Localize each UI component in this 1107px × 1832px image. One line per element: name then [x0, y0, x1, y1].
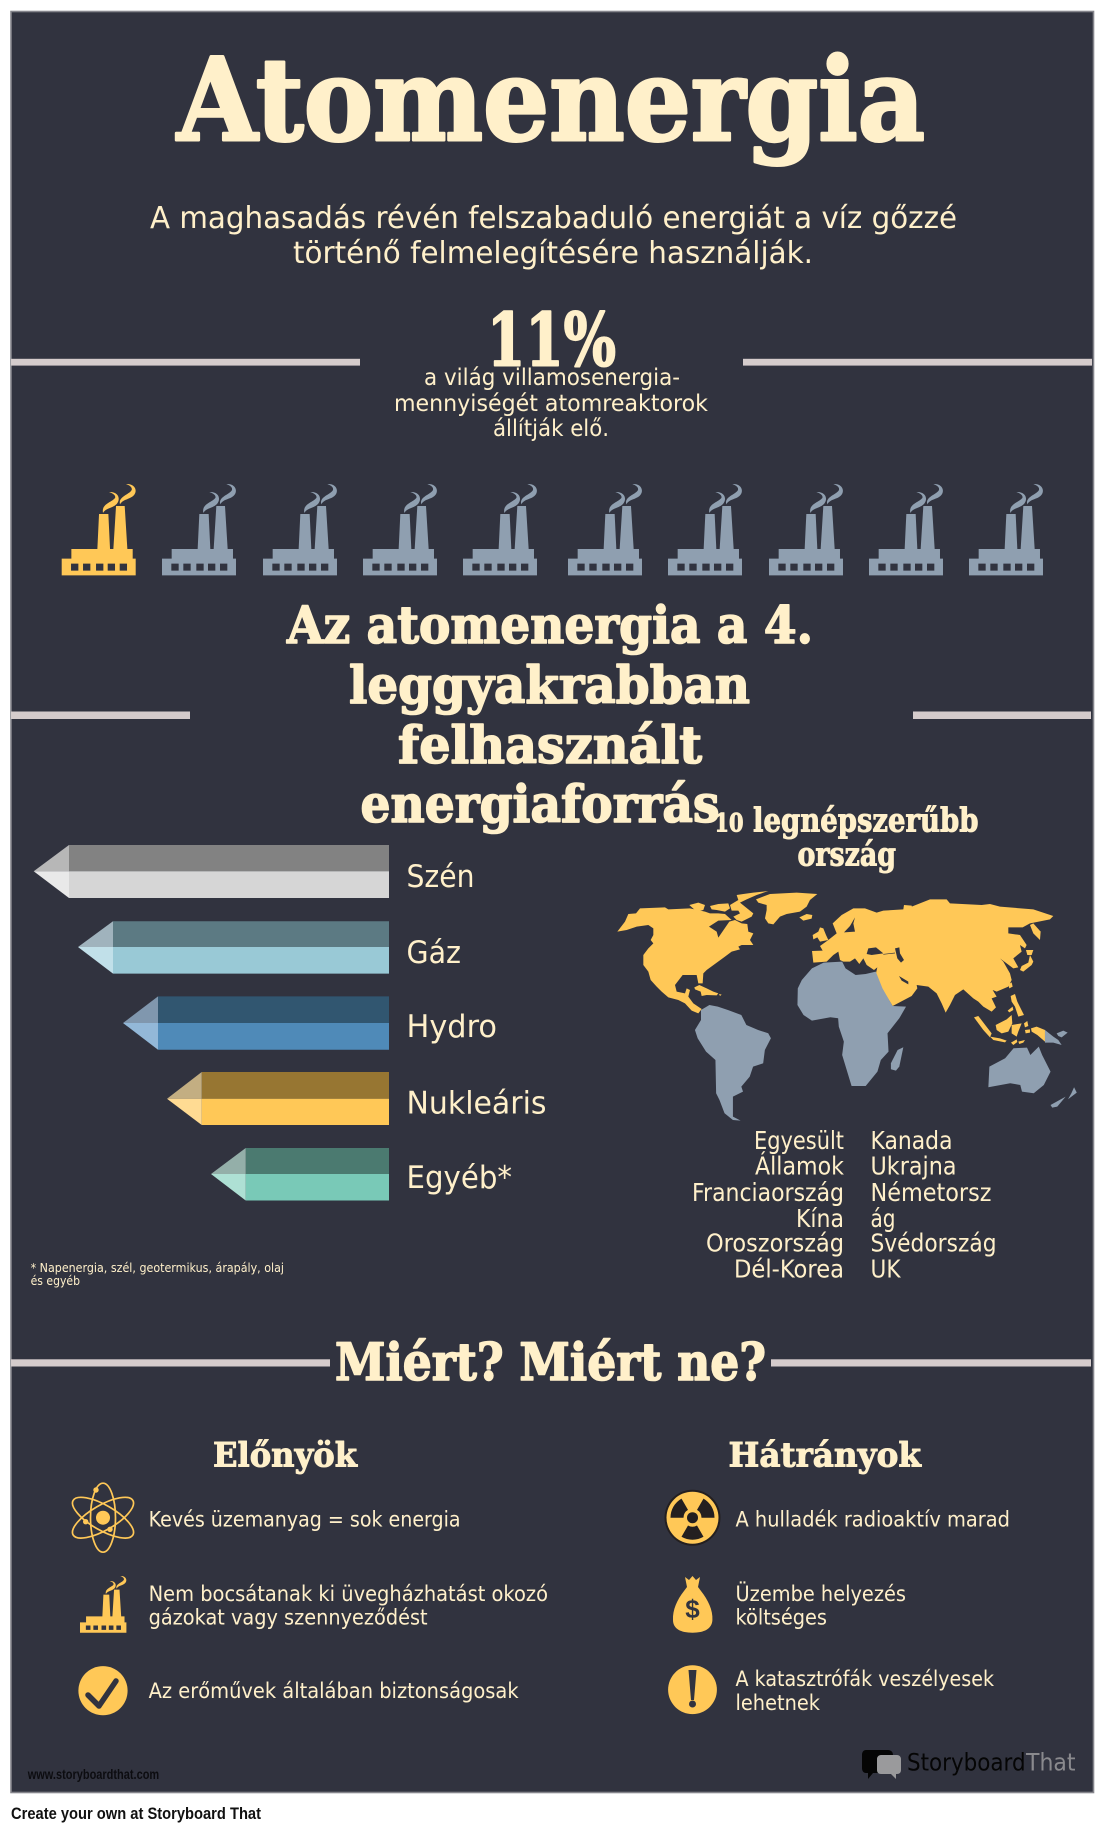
- country list: left column: Államok: [755, 1152, 844, 1180]
- footnote: [31, 1261, 284, 1288]
- advantage: no greenhouse gases: [149, 1582, 548, 1629]
- bar: hydro: Hydro: [406, 1009, 497, 1045]
- icon: highlighted factory: [62, 484, 136, 575]
- factory pictogram row: 1 of 10 highlighted: [62, 484, 1043, 575]
- country list: right column: UK: [870, 1254, 901, 1284]
- logo: Storyboard That: [862, 1749, 1076, 1779]
- heading: top 10 countries: 10 legnépszerűbb: [714, 800, 978, 840]
- bar: gas: Gáz: [406, 935, 461, 971]
- statistic description: [394, 363, 708, 442]
- bar: other: Egyéb*: [406, 1160, 512, 1196]
- bar: nuclear: Nukleáris: [406, 1086, 546, 1122]
- icon: check mark: [78, 1666, 128, 1715]
- intro text: történő felmelegítésére használják.: [293, 236, 813, 271]
- country list: right column: ág: [870, 1204, 896, 1233]
- statistic description: a világ villamosenergia-: [424, 363, 680, 391]
- country list: right column: Németorsz: [870, 1178, 992, 1207]
- country list: right column: Ukrajna: [870, 1152, 956, 1180]
- map: New Guinea: [1045, 1030, 1068, 1045]
- advantage: safe plants: Az erőművek általában biztonságosak: [149, 1679, 519, 1703]
- icon: exclamation mark: [668, 1665, 717, 1714]
- bar: other: [211, 1148, 512, 1200]
- icon: radiation: [664, 1490, 720, 1546]
- map: inland seas: [844, 917, 908, 984]
- disadvantage: dangerous disasters: A katasztrófák veszélyesek: [736, 1667, 995, 1691]
- statistic description: állítják elő.: [493, 414, 609, 442]
- heading: fourth most used energy source: Az atomenergia a 4.: [286, 596, 813, 656]
- disadvantage: dangerous disasters: lehetnek: [736, 1691, 821, 1715]
- country list: left column: Dél-Korea: [734, 1254, 844, 1284]
- disadvantage: radioactive waste: A hulladék radioaktív marad: [736, 1508, 1010, 1532]
- country list: right column: Svédország: [870, 1228, 996, 1258]
- heading: fourth most used energy source: [286, 596, 813, 835]
- section dividers: statistic: [11, 359, 1092, 366]
- bar chart: energy sources: [34, 845, 546, 1200]
- map: Americas and Greenland: [617, 891, 817, 1013]
- country list: left column: Kína: [796, 1204, 844, 1233]
- icon: factory: [80, 1576, 126, 1633]
- icons: grey factories: [162, 484, 1043, 575]
- panel: disadvantages: [664, 1436, 1010, 1715]
- icon: money bag: $: [685, 1594, 700, 1624]
- bar: coal: [34, 845, 474, 898]
- bar: gas: [78, 921, 461, 974]
- heading: top 10 countries: ország: [798, 834, 896, 874]
- title: Atomenergia: [176, 33, 925, 167]
- heading: top 10 countries: [714, 800, 978, 874]
- logo: Storyboard That: Storyboard: [907, 1749, 1026, 1777]
- advantage: no greenhouse gases: gázokat vagy szennyeződést: [149, 1605, 428, 1629]
- bar: hydro: [123, 996, 497, 1050]
- heading: why and why not: Miért? Miért ne?: [335, 1333, 766, 1393]
- heading: fourth most used energy source: energiaforrás: [360, 775, 720, 835]
- section dividers: energy sources: [11, 712, 1091, 719]
- icon: money bag: [673, 1576, 712, 1633]
- footnote: és egyéb: [31, 1274, 80, 1288]
- website watermark: www.storyboardthat.com: [27, 1767, 159, 1782]
- intro text: A maghasadás révén felszabaduló energiát a víz gőzzé: [150, 201, 957, 236]
- country list: right column: [870, 1126, 996, 1284]
- country list: left column: Franciaország: [692, 1178, 844, 1207]
- country list: left column: [692, 1126, 844, 1284]
- map: Eurasia and islands: [812, 899, 1053, 1045]
- heading: fourth most used energy source: felhasznált: [398, 716, 702, 776]
- disadvantage: costly commissioning: költséges: [736, 1605, 827, 1629]
- heading: fourth most used energy source: leggyakrabban: [349, 656, 750, 716]
- icon: atom: [67, 1483, 139, 1552]
- disadvantage: costly commissioning: [736, 1581, 906, 1629]
- disadvantage: costly commissioning: Üzembe helyezés: [736, 1581, 906, 1606]
- world map: [617, 891, 1077, 1121]
- disadvantage: dangerous disasters: [736, 1667, 995, 1715]
- advantage: little fuel: Kevés üzemanyag = sok energia: [149, 1508, 461, 1532]
- footnote: * Napenergia, szél, geotermikus, árapály, olaj: [31, 1261, 284, 1275]
- country list: right column: Kanada: [870, 1126, 952, 1155]
- footer credit: Create your own at Storyboard That: [11, 1805, 261, 1823]
- advantage: no greenhouse gases: Nem bocsátanak ki üvegházhatást okozó: [149, 1582, 548, 1606]
- heading: disadvantages: Hátrányok: [728, 1436, 922, 1476]
- section dividers: why: [11, 1359, 1091, 1366]
- country list: left column: Oroszország: [706, 1228, 844, 1258]
- map: other continents: [695, 962, 1077, 1121]
- country list: left column: Egyesült: [754, 1126, 844, 1155]
- logo: Storyboard That: That: [1025, 1749, 1076, 1777]
- panel: advantages: [67, 1436, 548, 1715]
- heading: advantages: Előnyök: [213, 1436, 358, 1476]
- statistic description: mennyiségét atomreaktorok: [394, 389, 708, 417]
- bar: nuclear: [167, 1072, 546, 1125]
- intro text: [150, 201, 957, 271]
- statistic: 11 percent: 11%: [487, 298, 616, 384]
- bar: coal: Szén: [406, 859, 474, 895]
